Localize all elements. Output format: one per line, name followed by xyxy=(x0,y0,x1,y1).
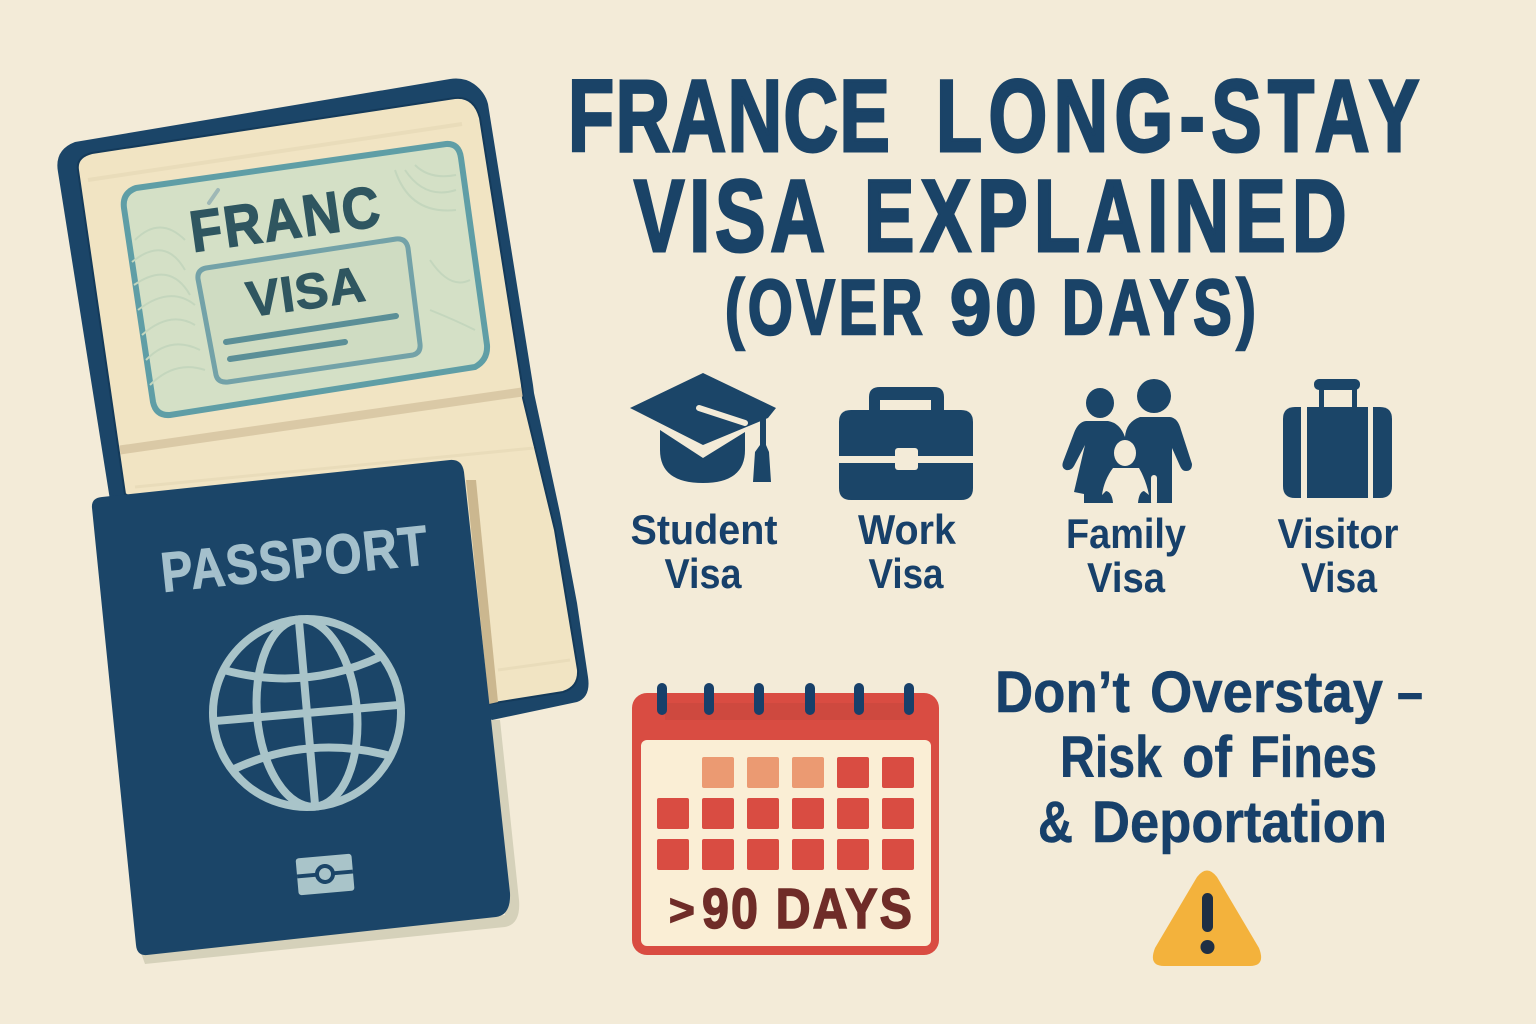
inner visa card xyxy=(198,239,420,382)
calendar page xyxy=(641,740,931,946)
binder rings xyxy=(657,683,914,715)
label: family visa xyxy=(1066,510,1187,601)
label: student visa: Student xyxy=(630,506,778,553)
open passport booklet with visa page xyxy=(57,79,589,720)
icon: family silhouette xyxy=(1062,379,1192,505)
calendar label: 90 DAYS xyxy=(702,877,912,941)
overstay warning text: Deportation xyxy=(1092,790,1387,855)
passport cover xyxy=(92,460,519,964)
calendar frame xyxy=(632,693,939,955)
visa type: student xyxy=(630,373,778,597)
label: work visa: Work xyxy=(858,506,957,553)
visa type: family xyxy=(1062,379,1192,601)
title xyxy=(568,60,1419,351)
stamp heading: FRANC xyxy=(186,173,384,264)
overstay warning text: Don’t xyxy=(995,660,1130,725)
icon: briefcase xyxy=(839,387,973,500)
label: family visa: Visa xyxy=(1087,554,1166,601)
day grid xyxy=(657,757,914,870)
visa type: visitor xyxy=(1278,379,1398,601)
label: student visa xyxy=(630,506,778,597)
stamp visa label: VISA xyxy=(243,256,368,328)
title: VISA xyxy=(634,160,825,274)
label: visitor visa: Visitor xyxy=(1278,510,1398,557)
passport body xyxy=(92,460,510,955)
title: LONG-STAY xyxy=(936,60,1419,174)
label: visitor visa xyxy=(1278,510,1398,601)
icon: suitcase xyxy=(1283,379,1392,498)
label: visitor visa: Visa xyxy=(1301,554,1378,601)
title: FRANCE xyxy=(568,60,890,174)
title: 90 xyxy=(950,264,1036,351)
overstay warning text xyxy=(995,660,1423,855)
calendar xyxy=(632,683,939,955)
overstay warning text: Risk xyxy=(1060,725,1163,790)
label: work visa: Visa xyxy=(868,550,944,597)
icon: warning triangle xyxy=(1153,870,1261,966)
visa type: work xyxy=(839,387,973,597)
overstay warning text: Overstay xyxy=(1150,660,1383,725)
booklet cover xyxy=(57,79,589,720)
passport shadow xyxy=(140,720,519,964)
title: DAYS) xyxy=(1062,264,1256,351)
visa stamp xyxy=(124,144,487,415)
visa page xyxy=(78,98,578,704)
icon: graduation cap xyxy=(630,373,776,483)
overstay warning text: & xyxy=(1038,790,1073,855)
label: family visa: Family xyxy=(1066,510,1187,557)
overstay warning text: – xyxy=(1397,660,1423,725)
passport heading: PASSPORT xyxy=(158,515,431,605)
label: work visa xyxy=(858,506,957,597)
globe icon xyxy=(205,611,409,815)
title: EXPLAINED xyxy=(864,160,1346,274)
title: (OVER xyxy=(725,264,923,351)
overstay warning text: of xyxy=(1182,725,1233,790)
label: student visa: Visa xyxy=(664,550,742,597)
overstay warning text: Fines xyxy=(1250,725,1377,790)
calendar label: > xyxy=(669,886,695,935)
page fold xyxy=(120,392,522,450)
biometric chip icon xyxy=(296,854,355,895)
